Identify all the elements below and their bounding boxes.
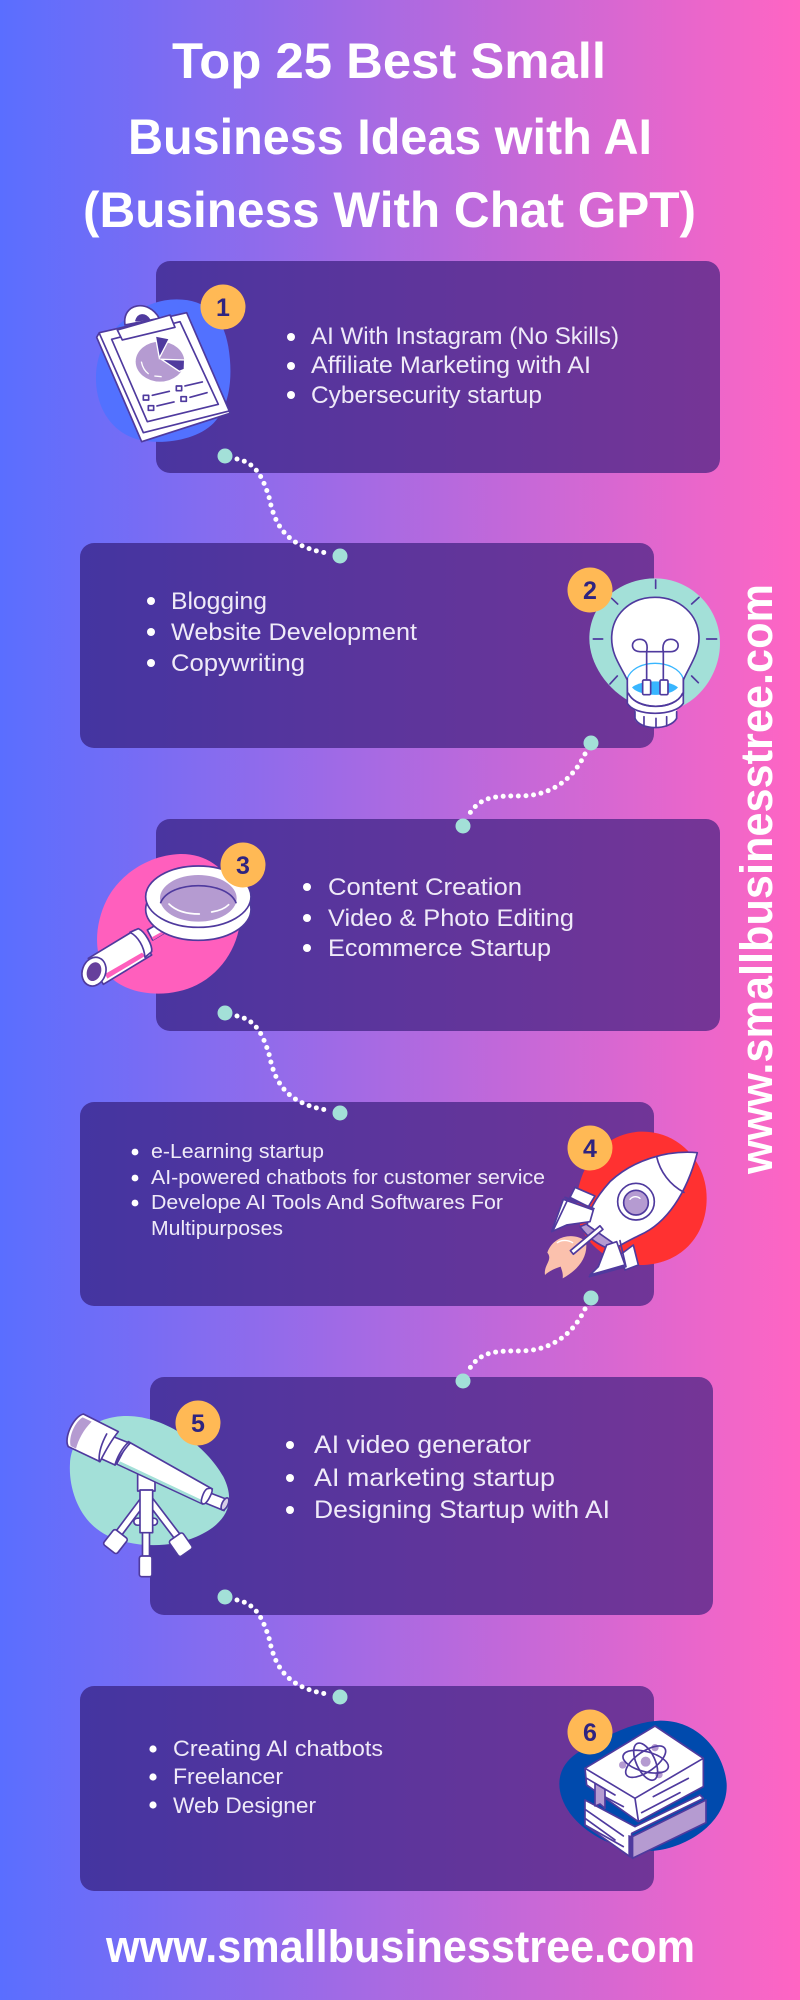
badge: 5: 5 bbox=[191, 1410, 205, 1438]
title: (Business With Chat GPT) bbox=[83, 182, 696, 238]
title: Top 25 Best Small bbox=[172, 33, 606, 89]
badge: 4: 4 bbox=[583, 1135, 597, 1163]
list: group 2: Blogging bbox=[171, 588, 267, 615]
list: group 5: AI video generator bbox=[314, 1431, 531, 1459]
list: group 1: Cybersecurity startup bbox=[311, 382, 542, 409]
icon: stacked books bbox=[559, 1721, 727, 1859]
panel: idea group 6 bbox=[80, 1686, 654, 1891]
list: group 4: e-Learning startup bbox=[151, 1141, 324, 1163]
panel: idea group 3 bbox=[156, 819, 720, 1031]
list: group 1: Affiliate Marketing with AI bbox=[311, 352, 591, 379]
badge: 1: 1 bbox=[216, 294, 230, 322]
connector: 1 to 2 bbox=[218, 448, 348, 564]
connector: 5 to 6 bbox=[218, 1590, 348, 1704]
footer website text: www.smallbusinesstree.com bbox=[105, 1921, 695, 1972]
list: group 4 bbox=[132, 1141, 545, 1240]
vertical website text: www.smallbusinesstree.com bbox=[731, 584, 782, 1175]
badge: 6 bbox=[568, 1710, 612, 1754]
title bbox=[83, 33, 696, 238]
list: group 6: Web Designer bbox=[173, 1793, 316, 1818]
panel: idea group 2 bbox=[80, 543, 654, 748]
list: group 5 bbox=[286, 1431, 610, 1524]
badge: 3: 3 bbox=[236, 852, 250, 880]
icon: rocket bbox=[545, 1132, 707, 1278]
panel: idea group 4 bbox=[80, 1102, 654, 1306]
list: group 6: Freelancer bbox=[173, 1764, 283, 1789]
list: group 4: Develope AI Tools And Softwares For bbox=[151, 1192, 503, 1214]
list: group 5: Designing Startup with AI bbox=[314, 1496, 610, 1524]
badge: 5 bbox=[176, 1400, 220, 1446]
list: group 6: Creating AI chatbots bbox=[173, 1736, 383, 1761]
icon: magnifying glass bbox=[78, 854, 251, 994]
connector: 3 to 4 bbox=[218, 1006, 348, 1120]
list: group 3: Content Creation bbox=[328, 874, 522, 901]
connector: 2 to 3 bbox=[456, 736, 598, 834]
list: group 2: Website Development bbox=[171, 619, 417, 646]
list: group 3: Ecommerce Startup bbox=[328, 935, 551, 962]
list: group 4: Multipurposes bbox=[151, 1218, 283, 1240]
panel: idea group 5 bbox=[150, 1377, 713, 1615]
list: group 2 bbox=[147, 588, 417, 677]
badge: 2: 2 bbox=[583, 577, 597, 605]
icon: clipboard with pie chart bbox=[96, 299, 230, 442]
badge: 3 bbox=[220, 842, 266, 888]
icon: telescope bbox=[67, 1414, 231, 1577]
badge: 4 bbox=[568, 1126, 612, 1170]
list: group 1 bbox=[287, 323, 619, 409]
list: group 3 bbox=[303, 874, 574, 962]
badge: 2 bbox=[568, 568, 612, 612]
badge: 6: 6 bbox=[583, 1719, 597, 1747]
title: Business Ideas with AI bbox=[128, 109, 652, 165]
list: group 6 bbox=[149, 1736, 383, 1818]
list: group 4: AI-powered chatbots for customer service bbox=[151, 1167, 545, 1189]
badge: 1 bbox=[200, 284, 246, 330]
list: group 1: AI With Instagram (No Skills) bbox=[311, 323, 619, 350]
connector: 4 to 5 bbox=[456, 1290, 598, 1388]
list: group 3: Video & Photo Editing bbox=[328, 905, 574, 932]
icon: light bulb bbox=[589, 578, 720, 728]
list: group 2: Copywriting bbox=[171, 650, 305, 677]
panel: idea group 1 bbox=[156, 261, 720, 473]
list: group 5: AI marketing startup bbox=[314, 1464, 555, 1492]
